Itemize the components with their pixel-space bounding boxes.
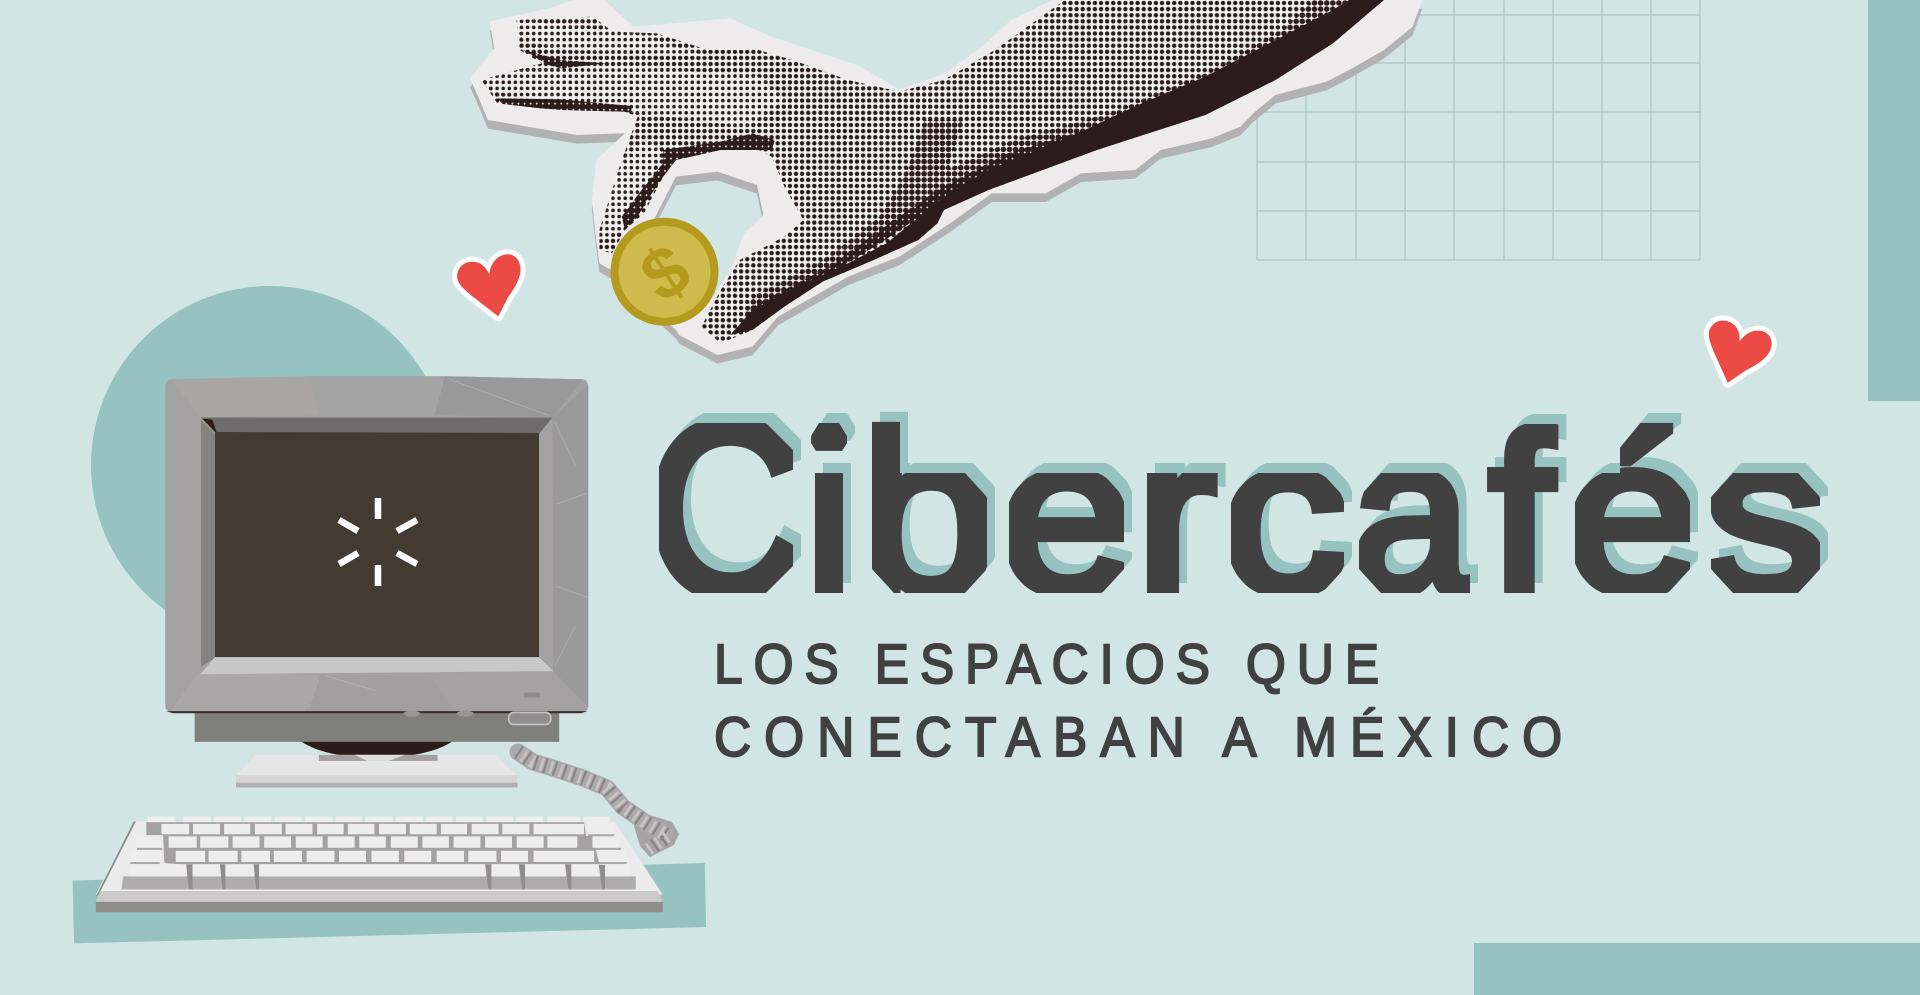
- title letters: c: [1221, 391, 1347, 640]
- title shadow: f: [1497, 376, 1562, 633]
- title letters: C: [647, 371, 803, 648]
- grid pattern: [1257, 0, 1700, 260]
- coin: [610, 218, 718, 326]
- subtitle: [714, 633, 1562, 768]
- title letters: e: [999, 391, 1134, 640]
- keyboard: [96, 816, 663, 912]
- monitor: [165, 376, 588, 742]
- screen: [215, 432, 539, 657]
- title letters: [659, 422, 1820, 593]
- coiled cable: [518, 752, 679, 857]
- title shadow: a: [1360, 381, 1479, 630]
- title letters: é: [1565, 391, 1700, 640]
- title shadow: e: [1007, 381, 1142, 630]
- computer: [96, 376, 679, 912]
- accent block: bottom right: [1474, 943, 1920, 995]
- title shadow: C: [655, 361, 811, 638]
- monitor stand: [236, 741, 518, 787]
- title letters: f: [1489, 386, 1554, 643]
- teal circle behind monitor: [91, 286, 449, 644]
- title shadow: b: [865, 376, 1005, 633]
- title letters: s: [1704, 391, 1828, 639]
- heart right: [1697, 317, 1775, 392]
- title shadow: i: [807, 376, 867, 633]
- paper cut-out sticker: [470, 0, 1422, 364]
- title shadow: s: [1712, 381, 1836, 629]
- title shadow: c: [1229, 381, 1355, 630]
- heart left: [454, 252, 530, 323]
- subtitle line 1: LOS ESPACIOS QUE: [714, 633, 1379, 695]
- title letters: b: [857, 386, 997, 643]
- dollar sign: $: [627, 229, 704, 318]
- title shadow: [676, 412, 1828, 583]
- title shadow: r: [1144, 382, 1224, 630]
- accent block: top right: [1868, 0, 1920, 401]
- halftone arm: [482, 0, 1384, 344]
- loading spinner: [339, 498, 417, 586]
- title letters: r: [1136, 392, 1216, 640]
- teal slab under keyboard: [73, 863, 706, 943]
- title letters: i: [799, 386, 859, 643]
- title letters: a: [1352, 391, 1471, 640]
- title shadow: é: [1573, 381, 1708, 630]
- hand with halftone holding coin: [460, 0, 1460, 364]
- title: Cibercafés: [659, 412, 1828, 593]
- subtitle line 2: CONECTABAN A MÉXICO: [714, 706, 1562, 768]
